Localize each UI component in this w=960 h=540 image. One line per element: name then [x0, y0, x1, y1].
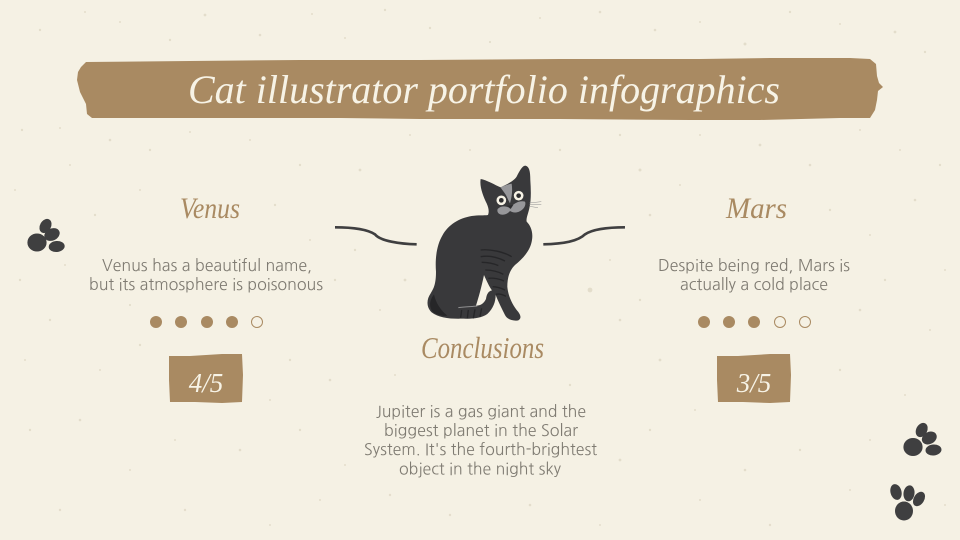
panel: Conclusions [364, 330, 597, 478]
whiskers [529, 202, 541, 208]
muzzle [497, 201, 525, 215]
banner brush shape [77, 58, 883, 120]
panel: Mars [658, 192, 850, 403]
text block: Mars description: actually a cold place [680, 277, 828, 293]
tail stripes and body stripes [461, 250, 512, 318]
heading: Venus: Venus [180, 192, 240, 225]
score badge: 4/5 [169, 354, 243, 403]
title banner [77, 58, 883, 120]
heading: Mars: Mars [725, 192, 787, 225]
text block: Mars description: Despite being red, Mars is [658, 258, 850, 274]
panel: Venus [89, 192, 323, 403]
icon: paw right lower [889, 483, 928, 520]
title text: Cat illustrator portfolio infographics [188, 67, 780, 112]
text block: Jupiter description: object in the night sky [399, 462, 562, 478]
text block: Jupiter description: biggest planet in the Solar [384, 423, 578, 439]
eyes [496, 195, 506, 205]
heading: Conclusions: Conclusions [421, 330, 544, 365]
gap between tail and leg [476, 275, 492, 306]
nose [507, 205, 513, 209]
text block: Jupiter description: System. It's the fourth-brightest [364, 442, 597, 458]
text block: Jupiter description: Jupiter is a gas giant and the [376, 404, 586, 420]
score badge: 3/5 [717, 354, 791, 403]
text block: Venus description: Venus has a beautiful name, [102, 258, 312, 274]
rating dots: 3 of 5 [698, 316, 810, 328]
icon: paw right upper [903, 421, 942, 456]
text block: Venus description: but its atmosphere is poisonous [89, 277, 323, 293]
cat body [428, 166, 532, 321]
arrow: right connector [543, 227, 625, 244]
tail highlight [458, 306, 477, 308]
icon: black cat illustration [428, 166, 541, 321]
face grey patch [501, 184, 512, 203]
icon: paw left [27, 217, 65, 253]
rating dots: 4 of 5 [150, 316, 262, 328]
score badge: 4/5: 4/5 [189, 368, 223, 398]
haunch shadow [430, 294, 447, 316]
score badge: 3/5: 3/5 [736, 368, 771, 398]
arrow: left connector [335, 227, 417, 244]
